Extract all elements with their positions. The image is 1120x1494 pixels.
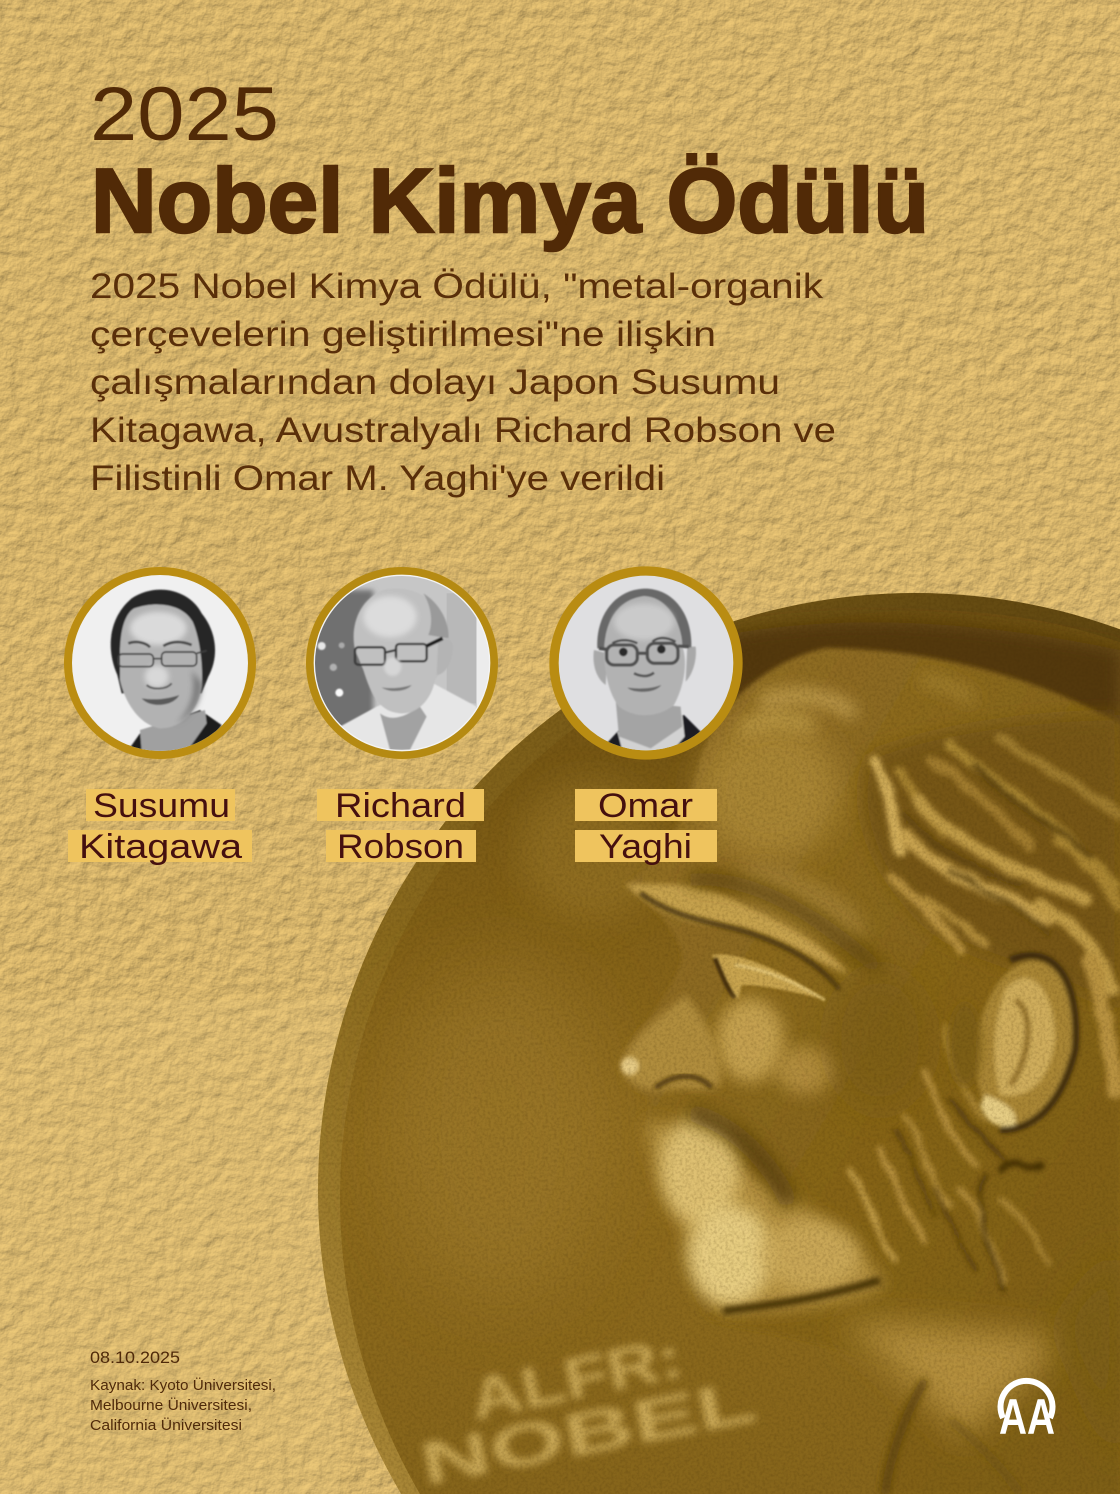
icon: AA logo — [999, 1381, 1055, 1445]
intro text block: Kitagawa, Avustralyalı Richard Robson ve — [90, 411, 836, 450]
ear — [949, 954, 1084, 1136]
forehead top highlights — [745, 680, 970, 728]
medal inscription: ALFR: — [464, 1324, 688, 1433]
main title: Nobel Kimya Ödülü — [91, 151, 929, 252]
year heading: 2025 — [90, 72, 279, 157]
medal rim — [318, 590, 1120, 1494]
beard strands — [850, 1025, 1050, 1290]
head of Alfred Nobel — [620, 648, 1120, 1494]
name label: Omar Yaghi: Omar — [598, 787, 693, 825]
intro text block: 2025 Nobel Kimya Ödülü, "metal-organik — [90, 267, 824, 306]
portrait: Susumu Kitagawa — [64, 567, 256, 759]
top shadow band — [736, 618, 1120, 721]
portrait: Richard Robson — [306, 567, 498, 759]
name label: Susumu Kitagawa — [68, 787, 252, 866]
forehead light — [700, 720, 840, 860]
intro text block: Filistinli Omar M. Yaghi'ye verildi — [90, 459, 665, 498]
date: 08.10.2025 — [90, 1348, 180, 1367]
intro text block: çalışmalarından dolayı Japon Susumu — [90, 363, 780, 402]
source note — [90, 1376, 276, 1434]
intro text block — [90, 267, 836, 498]
source note: Kaynak: Kyoto Üniversitesi, — [90, 1376, 276, 1394]
name label: Susumu Kitagawa: Kitagawa — [79, 828, 242, 866]
hair strands — [874, 738, 1118, 1090]
medal field — [340, 610, 1120, 1494]
name label: Omar Yaghi — [575, 787, 717, 866]
hair shadow region — [862, 715, 1120, 1010]
name label: Richard Robson: Robson — [337, 828, 464, 866]
medal inscription — [420, 1341, 758, 1487]
brow — [625, 884, 850, 975]
nobel medal photo — [318, 590, 1120, 1494]
neck and chest light — [840, 1324, 1060, 1440]
moustache and beard — [646, 1121, 885, 1312]
cheek highlights — [716, 998, 784, 1082]
medal grain — [318, 590, 1120, 1494]
icon: AA logo: AA — [999, 1389, 1055, 1445]
portrait: Omar Yaghi — [549, 566, 743, 760]
nose — [622, 995, 721, 1090]
name label: Richard Robson: Richard — [335, 787, 466, 825]
name label: Omar Yaghi: Yaghi — [599, 828, 692, 866]
name label: Susumu Kitagawa: Susumu — [93, 787, 230, 825]
source note: California Üniversitesi — [90, 1416, 242, 1434]
source note: Melbourne Üniversitesi, — [90, 1396, 252, 1414]
name label: Richard Robson — [317, 787, 484, 866]
eye — [712, 954, 825, 1000]
intro text block: çerçevelerin geliştirilmesi"ne ilişkin — [90, 315, 716, 354]
